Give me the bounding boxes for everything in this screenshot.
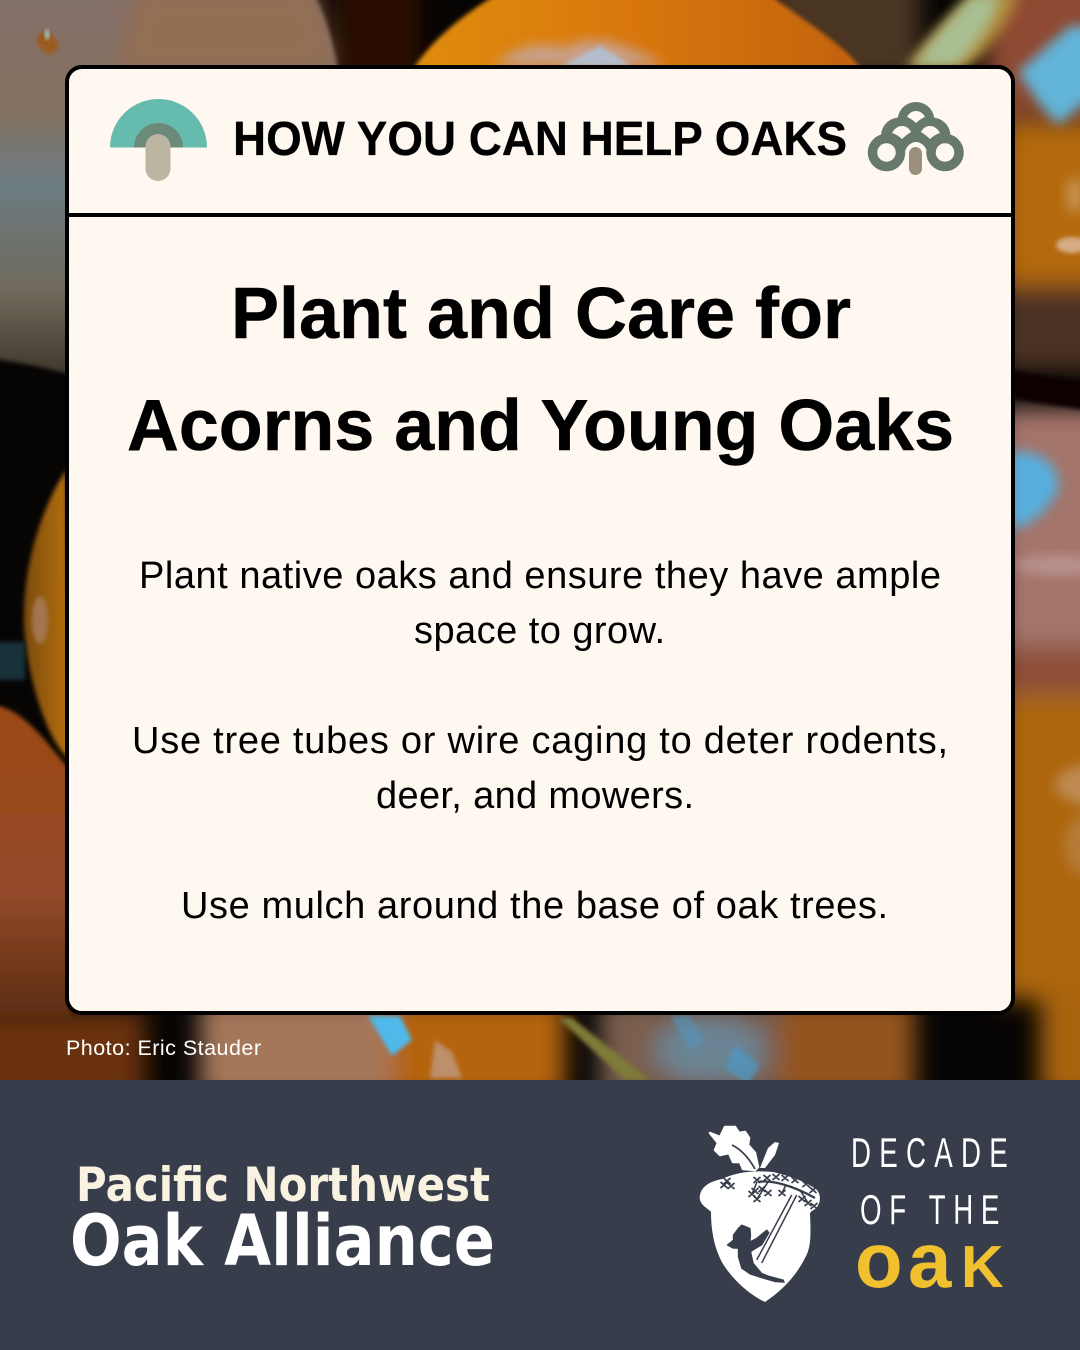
panel: main card xyxy=(67,67,1013,1013)
logo: acorn with girl on swing xyxy=(700,1127,820,1302)
tree branches and swing ropes xyxy=(720,1174,818,1263)
logo: pacific northwest oak alliance: Oak Alliance xyxy=(70,1200,495,1282)
logo: decade of the oak wordmark: DECADE xyxy=(851,1129,1016,1176)
body text: Use mulch around the base of oak trees. xyxy=(181,885,888,927)
logo: decade of the oak wordmark: o xyxy=(855,1216,903,1304)
footer band xyxy=(0,1080,1080,1350)
title: Acorns and Young Oaks xyxy=(127,386,954,466)
body text xyxy=(132,555,948,927)
small leaf xyxy=(760,1142,779,1168)
heading: how you can help oaks: HOW YOU CAN HELP OAKS xyxy=(233,113,847,166)
body text: deer, and mowers. xyxy=(376,775,694,817)
logo: pacific northwest oak alliance xyxy=(70,1158,495,1282)
logo: decade of the oak wordmark: a xyxy=(908,1216,952,1304)
icon: mushroom xyxy=(110,99,207,181)
acorn body xyxy=(700,1171,820,1302)
logo: decade of the oak wordmark: OF THE xyxy=(860,1186,1007,1233)
body text: space to grow. xyxy=(414,610,665,652)
logo: decade of the oak wordmark xyxy=(851,1129,1016,1304)
body text: Plant native oaks and ensure they have ample xyxy=(139,555,941,597)
title: Plant and Care for xyxy=(231,274,851,354)
leaf vein xyxy=(732,1145,755,1169)
body text: Use tree tubes or wire caging to deter rodents, xyxy=(132,720,948,762)
logo: decade of the oak wordmark: K xyxy=(961,1234,1004,1300)
icon: tree xyxy=(872,102,959,176)
girl silhouette xyxy=(727,1225,784,1282)
photo credit: Photo: Eric Stauder xyxy=(66,1036,261,1060)
oak leaf xyxy=(710,1127,758,1170)
title xyxy=(127,274,954,466)
logo: pacific northwest oak alliance: Pacific Northwest xyxy=(76,1158,490,1213)
